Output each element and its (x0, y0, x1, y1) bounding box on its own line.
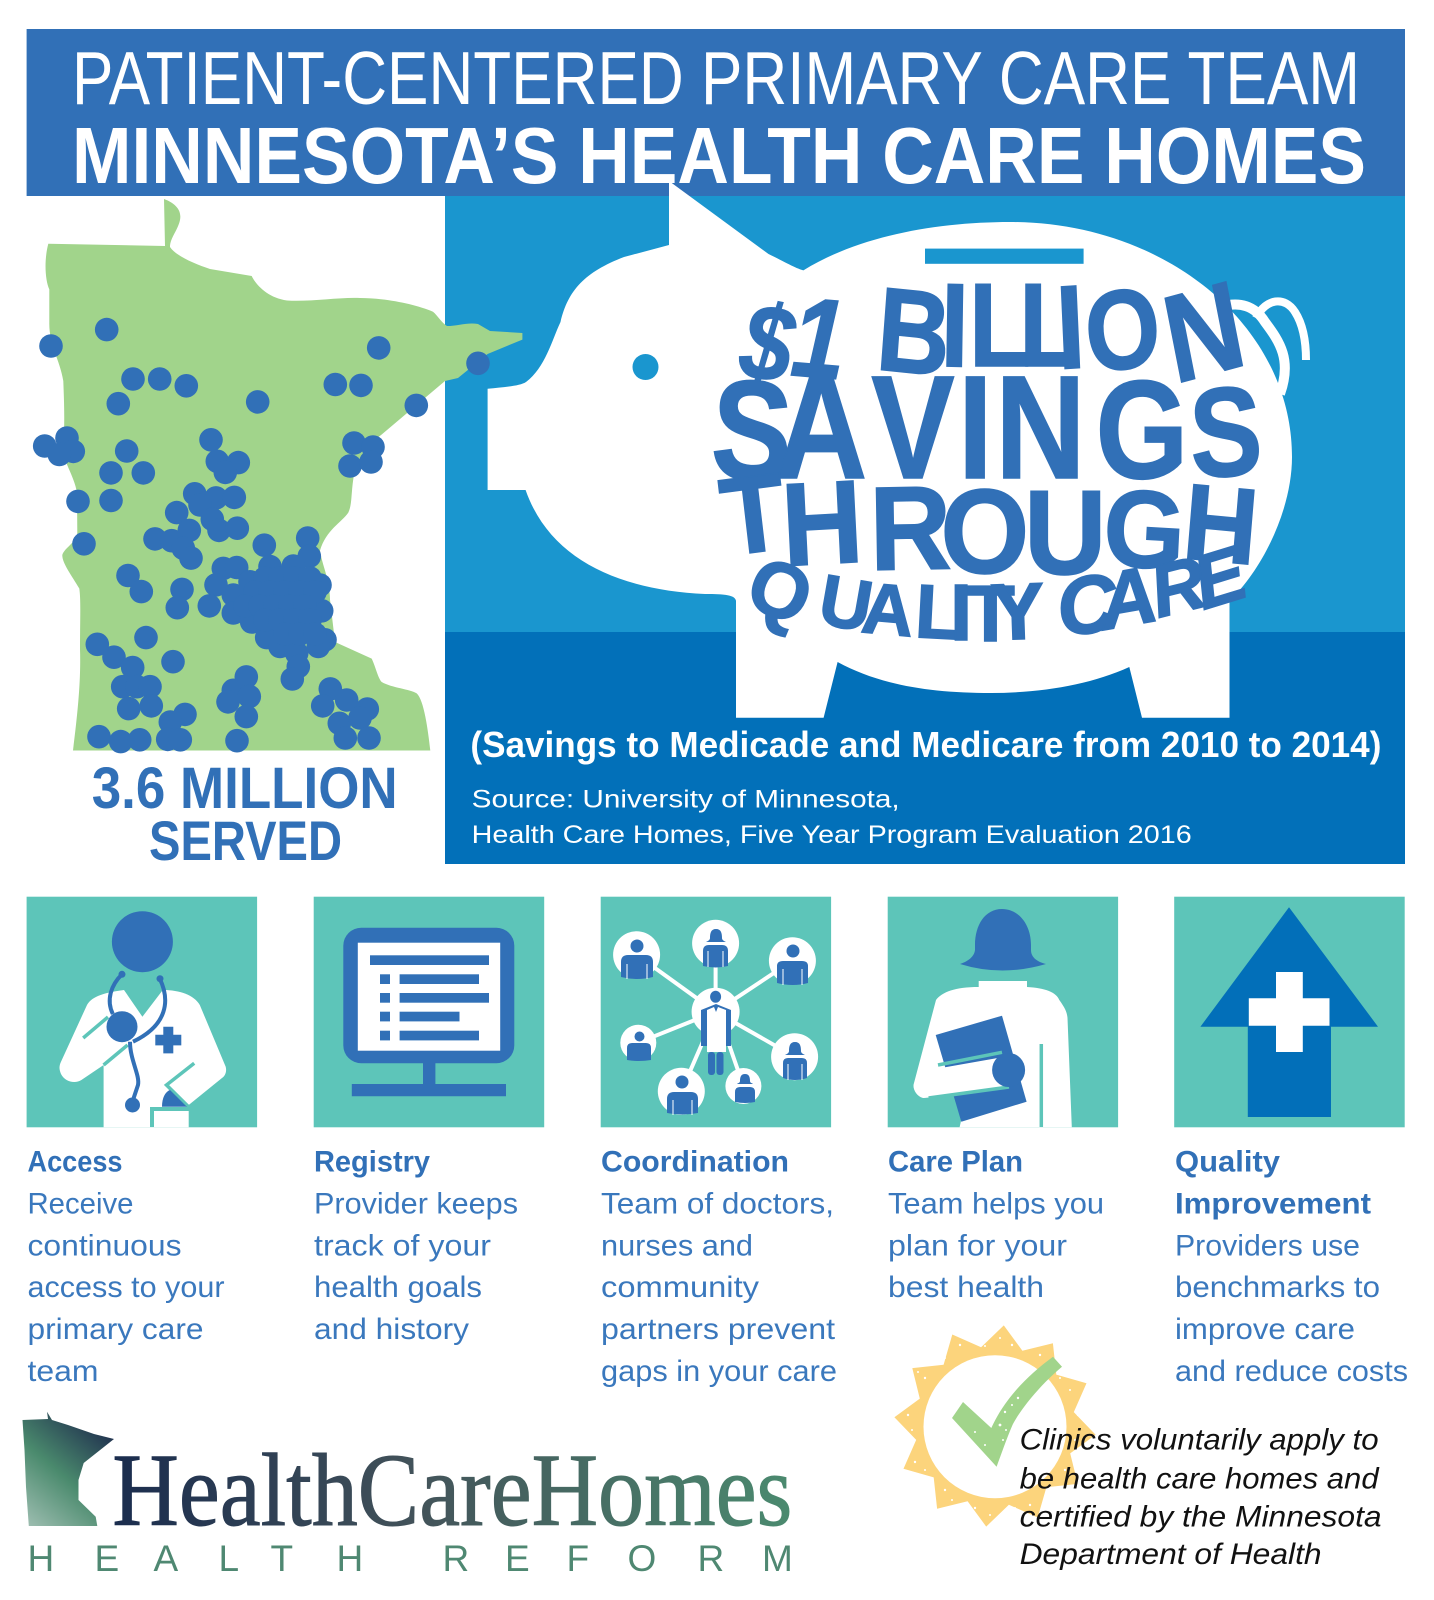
white body (913, 981, 1072, 1127)
coat cross (155, 1027, 181, 1053)
text block: coordination (601, 1146, 837, 1388)
headline: $1 billion savings through quality care: N (995, 345, 1086, 509)
clipboard (152, 1109, 190, 1127)
text block: care plan: best health (888, 1271, 1044, 1304)
figure arm slits (627, 951, 802, 1115)
text block: access: Receive (28, 1188, 134, 1220)
pig eye (632, 354, 658, 380)
up arrow (1200, 907, 1378, 1117)
headline: $1 billion savings through quality care: G (1096, 351, 1188, 508)
logo tagline: HEALTH REFORM (28, 1538, 793, 1579)
seal star (894, 1325, 1096, 1527)
text block: access (28, 1146, 225, 1388)
stethoscope (106, 971, 165, 1112)
headline: $1 billion savings through quality care: H (778, 456, 866, 592)
tile: access, doctor icon (27, 897, 257, 1127)
headline: $1 billion savings through quality care: C (1052, 557, 1123, 654)
tile: care plan, care worker icon (888, 897, 1118, 1127)
person figures (621, 929, 808, 1114)
text block: care plan: plan for your (888, 1229, 1067, 1262)
headline: $1 billion savings through quality care: I (950, 568, 972, 657)
connector lines (637, 943, 795, 1091)
badge: certified seal with check mark (894, 1325, 1096, 1527)
person circles (613, 920, 818, 1115)
icon: piggy bank (488, 181, 1306, 718)
text block: quality improvement: Quality (1175, 1146, 1280, 1179)
stat: 3.6 million served (92, 756, 398, 872)
text block: quality improvement: Improvement (1175, 1188, 1371, 1220)
headline: $1 billion savings through quality care: S (708, 349, 796, 512)
text block: quality improvement: improve care (1175, 1313, 1355, 1346)
headline: $1 billion savings through quality care: R (1142, 540, 1214, 634)
stat: 3.6 million served: SERVED (149, 809, 342, 872)
center person coat (707, 1007, 726, 1052)
savings caption: (Savings to Medicade and Medicare from 2010 to 2014) (470, 724, 1381, 765)
text block: coordination: partners prevent (601, 1313, 836, 1346)
stat: 3.6 million served: 3.6 MILLION (92, 756, 398, 821)
text block: access: Access (28, 1146, 122, 1179)
headline: $1 billion savings through quality care: V (871, 345, 955, 509)
folder (936, 1016, 1027, 1122)
text block: care plan: Team helps you (888, 1188, 1104, 1220)
headline: $1 billion savings through quality care: A (775, 343, 867, 510)
coat creases (83, 1017, 194, 1107)
text block: care plan (888, 1146, 1104, 1304)
source note: Source: University of Minnesota, (472, 786, 900, 814)
logo: Health Care Homes (22, 1412, 793, 1579)
monitor stand (352, 1063, 506, 1096)
headline: $1 billion savings through quality care: I (940, 259, 970, 392)
headline: $1 billion savings through quality care: G (1101, 466, 1188, 593)
doctor coat (60, 990, 226, 1127)
headline: $1 billion savings through quality care: U (813, 560, 878, 648)
text block: registry: Provider keeps (314, 1188, 518, 1220)
headline: $1 billion savings through quality care: O (941, 464, 1029, 599)
headline: $1 billion savings through quality care: $ (734, 280, 801, 408)
text block: access: continuous (28, 1229, 182, 1262)
folder page edges (929, 1044, 1041, 1127)
headline: $1 billion savings through quality care: U (1024, 465, 1106, 600)
callout: clinics certified: Clinics voluntarily apply to (1020, 1423, 1379, 1456)
headline: $1 billion savings through quality care: R (868, 461, 952, 596)
tile: coordination, network of people icon (601, 897, 831, 1127)
headline: $1 billion savings through quality care: Q (736, 538, 825, 642)
headline: $1 billion savings through quality care: I (1054, 261, 1087, 395)
headline: $1 billion savings through quality care (708, 253, 1265, 658)
source note: Health Care Homes, Five Year Program Evaluation 2016 (472, 821, 1192, 849)
headline: $1 billion savings through quality care: L (969, 259, 1031, 392)
text block: care plan: Care Plan (888, 1146, 1023, 1179)
source note (472, 786, 1192, 849)
pig tail (1220, 301, 1306, 394)
tile: registry, monitor icon (314, 897, 544, 1127)
headline: $1 billion savings through quality care: L (1019, 259, 1081, 392)
headline: $1 billion savings through quality care: I (958, 345, 993, 509)
panel: Minnesota map with clinic dots (33, 199, 522, 753)
seal speckles (907, 1337, 1079, 1516)
callout: clinics certified: certified by the Minnesota (1020, 1501, 1382, 1534)
list lines (370, 955, 489, 1040)
headline: $1 billion savings through quality care: L (913, 569, 964, 656)
doctor head (112, 911, 173, 972)
hand in pocket (162, 1090, 187, 1107)
headline: $1 billion savings through quality care: A (1090, 549, 1164, 647)
hand (992, 1053, 1025, 1087)
text block: coordination: Coordination (601, 1146, 789, 1179)
coin slot (925, 249, 1084, 264)
logo map (22, 1412, 114, 1526)
callout: clinics certified: be health care homes and (1020, 1462, 1380, 1495)
text block: coordination: nurses and (601, 1229, 753, 1262)
check mark (952, 1357, 1062, 1467)
headline: $1 billion savings through quality care: T (966, 569, 1015, 658)
tile: quality improvement, arrow icon (1174, 897, 1405, 1127)
text block: registry (314, 1146, 518, 1346)
headline: $1 billion savings through quality care: B (873, 263, 955, 402)
callout: clinics certified: Department of Health (1020, 1538, 1322, 1571)
title banner (27, 29, 1405, 200)
text block: quality improvement (1175, 1146, 1408, 1388)
seal center (924, 1355, 1066, 1498)
text block: registry: health goals (314, 1271, 482, 1304)
panel: savings background (445, 196, 1405, 864)
headline: $1 billion savings through quality care: H (1179, 462, 1263, 588)
headline: $1 billion savings through quality care: E (1183, 529, 1259, 626)
forearm over folder (914, 1057, 1009, 1098)
text block: access: access to your (28, 1271, 225, 1304)
text block: access: team (28, 1355, 98, 1388)
text block: coordination: community (601, 1271, 759, 1304)
headline: $1 billion savings through quality care: O (1080, 263, 1165, 398)
headline: $1 billion savings through quality care: 1 (788, 274, 849, 404)
logo wordmark: HealthCareHomes (112, 1433, 792, 1548)
text block: registry: and history (314, 1313, 469, 1346)
text block: coordination: gaps in your care (601, 1355, 837, 1388)
headline: $1 billion savings through quality care: T (714, 449, 792, 579)
medical cross (1249, 972, 1330, 1052)
headline: $1 billion savings through quality care: A (859, 568, 917, 652)
clinic dots (33, 318, 490, 753)
text block: registry: Registry (314, 1146, 430, 1179)
text block: registry: track of your (314, 1229, 491, 1262)
text block: access: primary care (28, 1313, 204, 1346)
monitor (343, 928, 514, 1063)
callout: clinics certified (1020, 1423, 1382, 1571)
headline: $1 billion savings through quality care: N (1153, 253, 1255, 410)
map outline (46, 199, 522, 750)
text block: quality improvement: benchmarks to (1175, 1271, 1380, 1304)
text block: quality improvement: and reduce costs (1175, 1355, 1408, 1388)
text block: quality improvement: Providers use (1175, 1229, 1360, 1262)
text block: coordination: Team of doctors, (601, 1188, 834, 1220)
headline: $1 billion savings through quality care: Y (989, 566, 1046, 657)
headline: $1 billion savings through quality care: S (1187, 358, 1265, 505)
hair (960, 909, 1046, 970)
